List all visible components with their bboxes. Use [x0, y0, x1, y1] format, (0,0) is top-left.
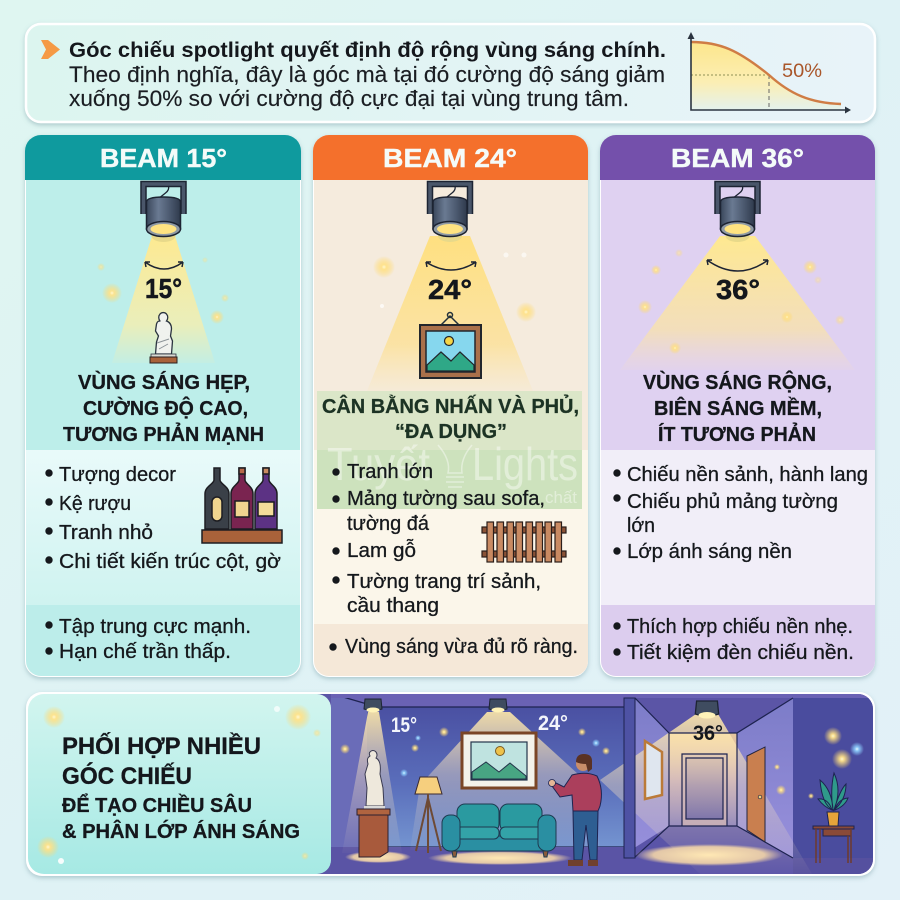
icon: wood slats [482, 522, 566, 562]
icon: orange arrow [41, 40, 60, 59]
angle arc [145, 262, 183, 269]
icon: framed picture [420, 312, 481, 378]
applications list: beam 24: cầu thang [347, 594, 439, 617]
angle label: 24° [428, 274, 472, 305]
statement: beam 15 [63, 370, 264, 446]
caption block: ĐỂ TẠO CHIỀU SÂU [62, 793, 252, 817]
header: beam 24: BEAM 24° [383, 143, 517, 173]
applications list: beam 15: Kệ rượu [59, 492, 131, 515]
statement: beam 15: CƯỜNG ĐỘ CAO, [83, 396, 248, 420]
header: beam 36 [600, 135, 875, 180]
applications list: beam 24: Mảng tường sau sofa, [347, 487, 545, 510]
drawbacks: beam 36: Tiết kiệm đèn chiếu nền. [627, 641, 854, 664]
panel: intro header card [26, 24, 875, 122]
statement: beam 36: ÍT TƯƠNG PHẢN [658, 423, 816, 446]
intro text: xuống 50% so với cường độ cực đại tại vùng trung tâm. [69, 86, 629, 111]
icon: spotlight [144, 184, 184, 242]
angle label: 15° [145, 273, 182, 304]
label 15: 15° [391, 714, 417, 737]
angle arc [707, 260, 768, 271]
drawbacks: beam 15: Hạn chế trần thấp. [59, 640, 231, 663]
watermark: Tuyết [327, 438, 430, 490]
door [747, 747, 765, 842]
watermark: Lights [472, 438, 578, 490]
applications list: beam 36: Lớp ánh sáng nền [627, 540, 792, 563]
ceiling lamp 36 [695, 701, 719, 719]
applications list: beam 24: Tranh lớn [347, 460, 433, 483]
green highlight band [317, 391, 582, 509]
applications list: beam 36 [613, 463, 868, 563]
angle label: 36° [716, 274, 760, 305]
header: beam 15: BEAM 15° [100, 143, 227, 173]
statement: beam 24 [322, 394, 579, 443]
label 36: 36° [693, 722, 723, 745]
applications list: beam 15: Tranh nhỏ [59, 521, 153, 544]
icon: wine bottles on shelf [202, 468, 282, 543]
light beam 24 [367, 236, 533, 391]
drawbacks: beam 15 [45, 615, 251, 663]
sparkles [373, 252, 536, 322]
angle arc [426, 262, 476, 270]
icon: spotlight [718, 184, 758, 242]
statement: beam 15: VÙNG SÁNG HẸP, [78, 370, 250, 394]
applications list: beam 36: Chiếu phủ mảng tường [627, 490, 838, 513]
wall mirror [645, 741, 662, 799]
drawbacks: beam 36: Thích hợp chiếu nền nhẹ. [627, 615, 853, 638]
illustration: room scene with three beams [310, 694, 875, 874]
intro text: Theo định nghĩa, đây là góc mà tại đó cường độ sáng giảm [69, 62, 665, 87]
intro text: Góc chiếu spotlight quyết định độ rộng vùng sáng chính. [69, 38, 666, 62]
applications list: beam 36: lớn [627, 514, 655, 537]
scene sparkles [340, 727, 864, 799]
statement: beam 36 [643, 370, 832, 446]
drawbacks: beam 15: Tập trung cực mạnh. [59, 615, 251, 638]
label 24: 24° [538, 712, 568, 735]
light beam 15 [112, 236, 215, 363]
statement: beam 15: TƯƠNG PHẢN MẠNH [63, 423, 264, 446]
panel: beam 36 [600, 135, 875, 677]
person gesturing at painting [548, 754, 601, 866]
sofa [442, 804, 556, 857]
statement: beam 24: “ĐA DỤNG” [395, 420, 507, 443]
applications list: beam 24: Tường trang trí sảnh, [347, 570, 541, 593]
header: beam 24 [313, 135, 588, 180]
panel: combining beam angles [26, 692, 875, 876]
applications list: beam 24: Lam gỗ [347, 539, 416, 562]
applications list: beam 24: tường đá [347, 512, 430, 535]
intro text [69, 38, 666, 111]
applications list: beam 15: Tượng decor [59, 463, 176, 486]
ceiling lamp 24 [489, 699, 507, 712]
framed painting [462, 733, 536, 788]
panel: beam 24 [313, 135, 588, 677]
beam: 24 degree [410, 712, 600, 850]
beam: 15 degree [342, 712, 402, 853]
watermark: chất [545, 488, 577, 507]
caption block: GÓC CHIẾU [62, 762, 192, 790]
sparkles [638, 249, 845, 354]
panel: beam 15 [25, 135, 301, 677]
light beam 36 [620, 236, 855, 370]
applications list: beam 24 [332, 460, 545, 617]
caption block [28, 694, 331, 874]
potted plant on side table [813, 773, 854, 863]
sparkles [97, 257, 229, 324]
caption block: PHỐI HỢP NHIỀU [62, 732, 261, 760]
header: beam 36: BEAM 36° [671, 143, 804, 173]
hallway outlines [635, 698, 793, 858]
watermark [327, 438, 578, 507]
icon: spotlight [430, 184, 470, 242]
drawbacks: beam 24: Vùng sáng vừa đủ rõ ràng. [345, 635, 578, 658]
beam: 36 degree [600, 714, 812, 874]
statement: beam 24: CÂN BẰNG NHẤN VÀ PHỦ, [322, 394, 579, 418]
icon: statue [150, 313, 177, 363]
statement: beam 36: VÙNG SÁNG RỘNG, [643, 370, 832, 394]
floor light pools [345, 844, 783, 866]
caption block: & PHÂN LỚP ÁNH SÁNG [62, 819, 300, 843]
statue on pedestal [357, 750, 390, 857]
header: beam 15 [25, 135, 301, 180]
applications list: beam 15: Chi tiết kiến trúc cột, gờ [59, 550, 281, 573]
drawbacks: beam 36 [613, 615, 854, 664]
chart: beam intensity falloff curve [688, 32, 851, 114]
chart: beam intensity falloff curve: 50% [782, 61, 822, 82]
applications list: beam 36: Chiếu nền sảnh, hành lang [627, 463, 868, 486]
applications list: beam 15 [45, 463, 281, 573]
statement: beam 36: BIÊN SÁNG MỀM, [654, 396, 822, 420]
ceiling lamp 15 [364, 699, 382, 712]
floor lamp [415, 777, 442, 853]
